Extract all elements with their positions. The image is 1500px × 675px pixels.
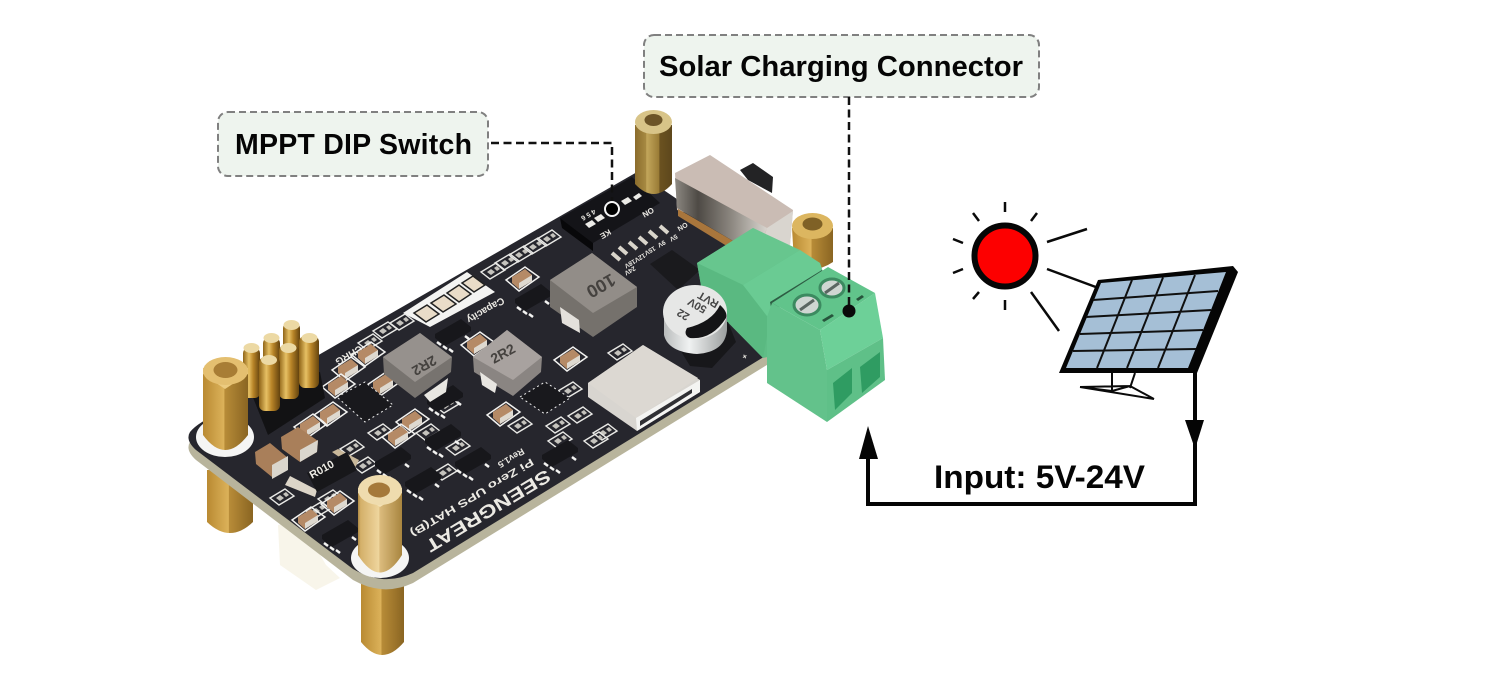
voltage select pads bbox=[612, 220, 688, 276]
R010 current sense resistor bbox=[285, 449, 359, 497]
inductor 2R2 right bbox=[473, 330, 542, 396]
white capacity LED strip bbox=[403, 272, 495, 327]
silk labels: + bbox=[740, 351, 749, 362]
wire entry holes bbox=[833, 352, 880, 410]
USB-C port bbox=[588, 345, 700, 431]
DIP switch bbox=[560, 177, 660, 251]
lower left standoff bbox=[207, 470, 253, 533]
voltage select pads: 24V bbox=[622, 264, 636, 276]
product photo: Pi Zero UPS HAT board bbox=[188, 110, 885, 655]
board surface bbox=[188, 172, 775, 579]
DIP switch: ON bbox=[640, 205, 656, 219]
electrolytic capacitor bbox=[663, 285, 736, 368]
voltage select pads: 5V bbox=[668, 232, 678, 243]
inductor 2R2 right: 2R2 bbox=[488, 340, 518, 367]
voltage select pads: 9V bbox=[656, 238, 666, 249]
panel stand bbox=[1080, 373, 1154, 399]
terminal screws bbox=[794, 279, 844, 315]
arrow: up to connector bbox=[859, 426, 878, 459]
callout: MPPT DIP Switch bbox=[218, 112, 488, 176]
inductor 2R2 left bbox=[383, 333, 452, 402]
icon: solar panel bbox=[1059, 266, 1238, 399]
electrolytic capacitor: 50V bbox=[685, 295, 709, 315]
electrolytic capacitor: 22 bbox=[675, 306, 692, 322]
pad clusters bbox=[270, 230, 632, 518]
voltage select pads: 18V bbox=[622, 257, 636, 269]
silk labels: Pi Zero UPS HAT(B) bbox=[408, 455, 536, 539]
front standoff with washer bbox=[351, 475, 409, 578]
DIP switch: 4 5 6 bbox=[579, 207, 596, 221]
upper left standoff with washer bbox=[196, 357, 254, 457]
arrow: down into loop bbox=[1185, 420, 1204, 449]
silk labels: SEENGREAT bbox=[422, 466, 554, 556]
slide switch bbox=[675, 155, 793, 250]
callout: Solar Charging Connector bbox=[644, 35, 1039, 97]
board edge bbox=[188, 182, 775, 589]
inductor 100 bbox=[550, 253, 637, 337]
callout: Solar Charging Connector: Solar Charging Connector bbox=[659, 51, 1023, 83]
white rear connector bbox=[278, 520, 340, 590]
QFN chips bbox=[337, 250, 700, 422]
SOT packages bbox=[322, 284, 578, 553]
DIP switch: KE bbox=[598, 227, 612, 241]
wire loop from panel to connector bbox=[868, 372, 1195, 504]
green terminal plug bbox=[697, 228, 826, 358]
voltage select pads: 15V bbox=[642, 244, 656, 256]
back standoff bbox=[635, 110, 672, 194]
electrolytic capacitor: RVT bbox=[696, 288, 721, 310]
lower front standoff bbox=[361, 580, 404, 655]
block top face bbox=[772, 267, 875, 330]
block lower front face bbox=[827, 338, 885, 422]
silk labels bbox=[333, 294, 749, 556]
voltage select pads: 12V bbox=[632, 251, 646, 263]
input voltage label: Input: 5V-24V bbox=[934, 459, 1146, 495]
leader line: Solar Charging Connector bbox=[842, 97, 856, 318]
block upper front face bbox=[820, 293, 883, 370]
inductor 100: 100 bbox=[583, 270, 619, 302]
gold header pins bbox=[243, 320, 325, 435]
large capacitors bbox=[255, 427, 318, 479]
leader line: MPPT DIP Switch bbox=[491, 143, 619, 216]
callout: MPPT DIP Switch: MPPT DIP Switch bbox=[235, 129, 472, 161]
SMD capacitors bbox=[292, 267, 587, 531]
block left face bbox=[767, 303, 827, 422]
silk labels: CHRG bbox=[333, 342, 364, 367]
inductor 2R2 left: 2R2 bbox=[409, 352, 440, 379]
voltage select pads: ON bbox=[676, 220, 688, 232]
R010 current sense resistor: R010 bbox=[308, 458, 336, 482]
icon: sun bbox=[953, 202, 1112, 331]
right standoff bbox=[792, 213, 833, 269]
silk labels: Capacity bbox=[464, 294, 506, 325]
green screw terminal block bbox=[767, 267, 885, 422]
silk labels: Rev1.5 bbox=[496, 446, 526, 470]
